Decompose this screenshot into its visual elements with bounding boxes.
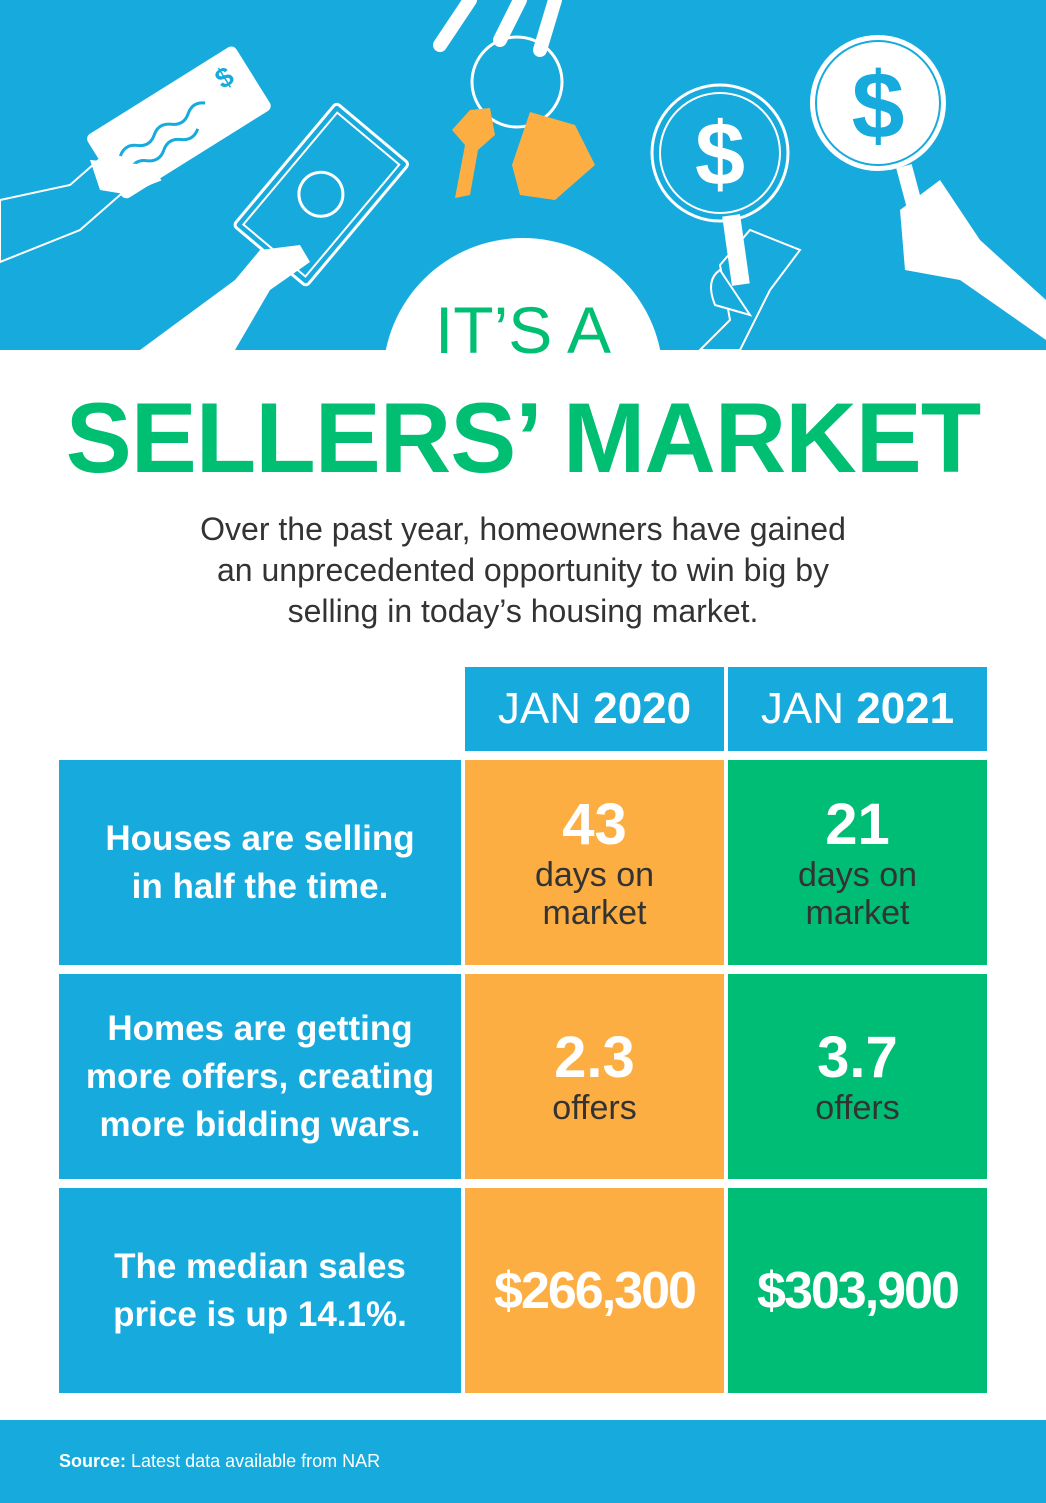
title: it's a: IT’S A: [435, 293, 611, 367]
row 1 2020: 43: [562, 792, 627, 856]
header illustration: [0, 0, 1046, 350]
row 2 label: more bidding wars.: [100, 1104, 420, 1144]
row 1 2020: [465, 760, 724, 965]
row 2 2021: 3.7: [817, 1024, 898, 1090]
row 1 2020: days on: [535, 856, 654, 894]
icon: paddle 1: [652, 85, 800, 350]
row 2 2020: [465, 974, 724, 1179]
row 2 label: more offers, creating: [86, 1056, 434, 1096]
icon: hand with check: $: [209, 60, 239, 95]
intro text: [200, 511, 846, 629]
icon: hand with check: [0, 44, 273, 262]
row 3 label: The median sales: [114, 1246, 406, 1286]
title bump: [383, 238, 663, 518]
footer: [0, 1420, 1046, 1503]
row 1 2021: days on: [798, 856, 917, 894]
intro text: Over the past year, homeowners have gained: [200, 511, 846, 547]
icon: keys on ring: [440, 0, 595, 200]
row 2 label: Homes are getting: [107, 1008, 413, 1048]
header: jan 2021: [728, 667, 987, 751]
row 1 2021: market: [806, 894, 909, 932]
row 3 label: price is up 14.1%.: [113, 1294, 407, 1334]
icon: hand with cash: [140, 103, 409, 350]
icon: paddle 2: $: [852, 53, 904, 159]
row 3 2020: [465, 1188, 724, 1393]
header: jan 2020: [465, 667, 724, 751]
icon: paddle 2: [810, 35, 1046, 340]
row 1 label: [59, 760, 461, 965]
row 3 2020: $266,300: [494, 1262, 695, 1320]
table: [59, 667, 987, 1393]
row 1 label: in half the time.: [132, 866, 388, 906]
row 1 2021: [728, 760, 987, 965]
row 3 2021: [728, 1188, 987, 1393]
intro text: an unprecedented opportunity to win big by: [217, 552, 829, 588]
row 3 label: [59, 1188, 461, 1393]
source text: Source: Latest data available from NAR: [59, 1451, 380, 1471]
row 1 label: Houses are selling: [105, 818, 415, 858]
icon: paddle 1: $: [695, 105, 745, 205]
row 2 2021: [728, 974, 987, 1179]
header: jan 2021: JAN 2021: [761, 684, 954, 733]
title: sellers' market: SELLERS’ MARKET: [66, 382, 980, 493]
row 1 2021: 21: [825, 792, 890, 856]
row 2 2020: offers: [552, 1088, 637, 1126]
row 2 2020: 2.3: [554, 1024, 635, 1090]
row 3 2021: $303,900: [757, 1262, 958, 1320]
header: jan 2020: JAN 2020: [498, 684, 691, 733]
row 2 2021: offers: [815, 1088, 900, 1126]
row 2 label: [59, 974, 461, 1179]
row 1 2020: market: [543, 894, 646, 932]
intro text: selling in today’s housing market.: [288, 593, 758, 629]
